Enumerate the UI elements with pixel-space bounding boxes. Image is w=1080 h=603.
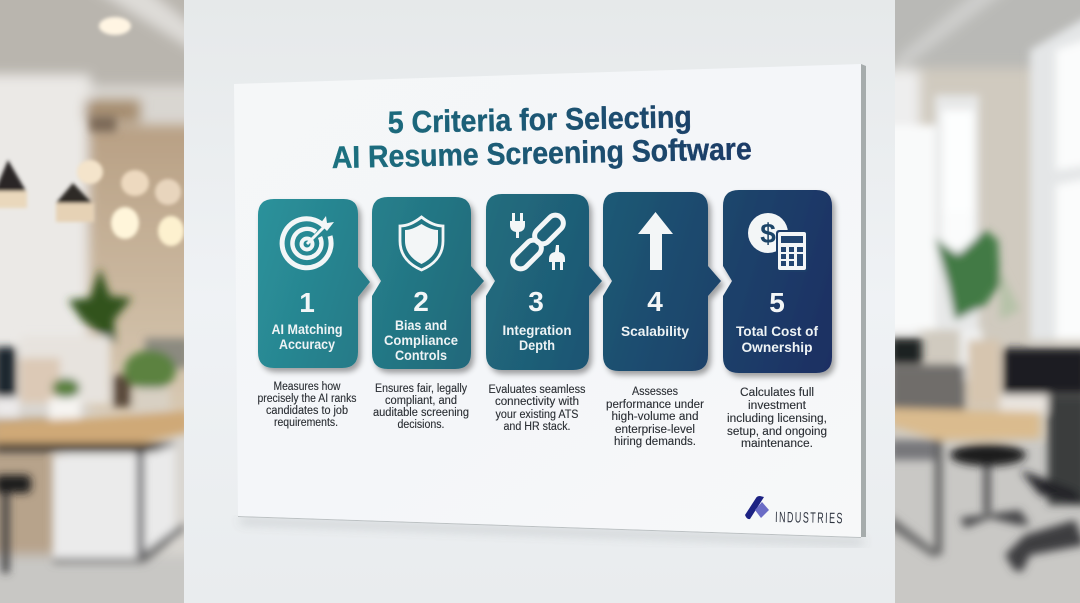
card 5: Total Cost of Ownership [723,190,832,373]
background: blurred office right [880,0,1080,603]
description 3: connectivity with [495,396,579,408]
logo: Industries: INDUSTRIES [775,509,844,527]
description 3: Evaluates seamless [488,384,586,396]
description 5: Calculates full [740,387,814,399]
number 1: 1 [299,287,315,318]
label: Integration Depth [502,323,572,353]
background: blurred office left [0,0,184,603]
title: AI Resume Screening Software [331,131,752,175]
description 5: including licensing, [727,413,827,425]
label: Bias and Compliance Controls: Compliance [384,333,458,348]
label: Bias and Compliance Controls: Controls [395,348,447,363]
description 1: candidates to job [266,405,348,417]
label: Scalability: Scalability [621,324,689,339]
description 5: maintenance. [741,438,813,450]
number 5: 5 [769,287,785,318]
card 3: Integration Depth [486,194,602,370]
description 4: high-volume and [612,411,698,423]
description 5: investment [748,400,807,412]
icon: target with arrow [282,216,334,268]
icon: shield [400,217,443,270]
description 4: Assesses [632,386,678,398]
icon: up arrow [638,212,673,270]
description 2: compliant, and [385,395,457,407]
description 5: setup, and ongoing [727,426,827,438]
description 4: hiring demands. [614,436,696,448]
label: Total Cost of Ownership [736,324,818,355]
label: AI Matching Accuracy: AI Matching [272,322,342,337]
description 1: precisely the AI ranks [258,393,357,405]
description 2: auditable screening [373,407,469,419]
description 3 [488,384,586,433]
description 4: enterprise-level [615,424,695,436]
number 2: 2 [413,286,429,317]
description 1: Measures how [274,381,341,393]
card 2: Bias and Compliance Controls [372,197,484,369]
description 5 [727,387,827,450]
wall panel [184,0,895,603]
description 1: requirements. [274,417,338,429]
label: AI Matching Accuracy: Accuracy [279,337,335,352]
icon: dollar coin and calculator [748,213,808,272]
title: 5 Criteria for Selecting [387,99,692,140]
description 2: Ensures fair, legally [375,383,467,395]
label: Bias and Compliance Controls [384,318,458,363]
description 3: your existing ATS [496,409,579,421]
label: Bias and Compliance Controls: Bias and [395,318,447,333]
card 4: Scalability [603,192,721,371]
number 4: 4 [647,286,663,317]
logo: Industries [745,496,844,527]
label: Integration Depth: Integration [502,323,572,338]
description 3: and HR stack. [504,421,570,433]
label: Total Cost of Ownership: Total Cost of [736,324,818,339]
description 4 [606,386,704,448]
number 3: 3 [528,286,544,317]
icon: chain link with plugs [509,212,567,272]
description 2 [373,383,469,431]
description 4: performance under [606,399,704,411]
label: Integration Depth: Depth [519,338,555,353]
title [331,99,752,175]
card 1: AI Matching Accuracy [258,199,370,368]
label: Total Cost of Ownership: Ownership [742,340,812,355]
icon: dollar coin and calculator: $ [760,218,776,249]
description 1 [258,381,357,429]
description 2: decisions. [398,419,444,431]
label: AI Matching Accuracy [272,322,342,352]
sign board [234,64,866,545]
